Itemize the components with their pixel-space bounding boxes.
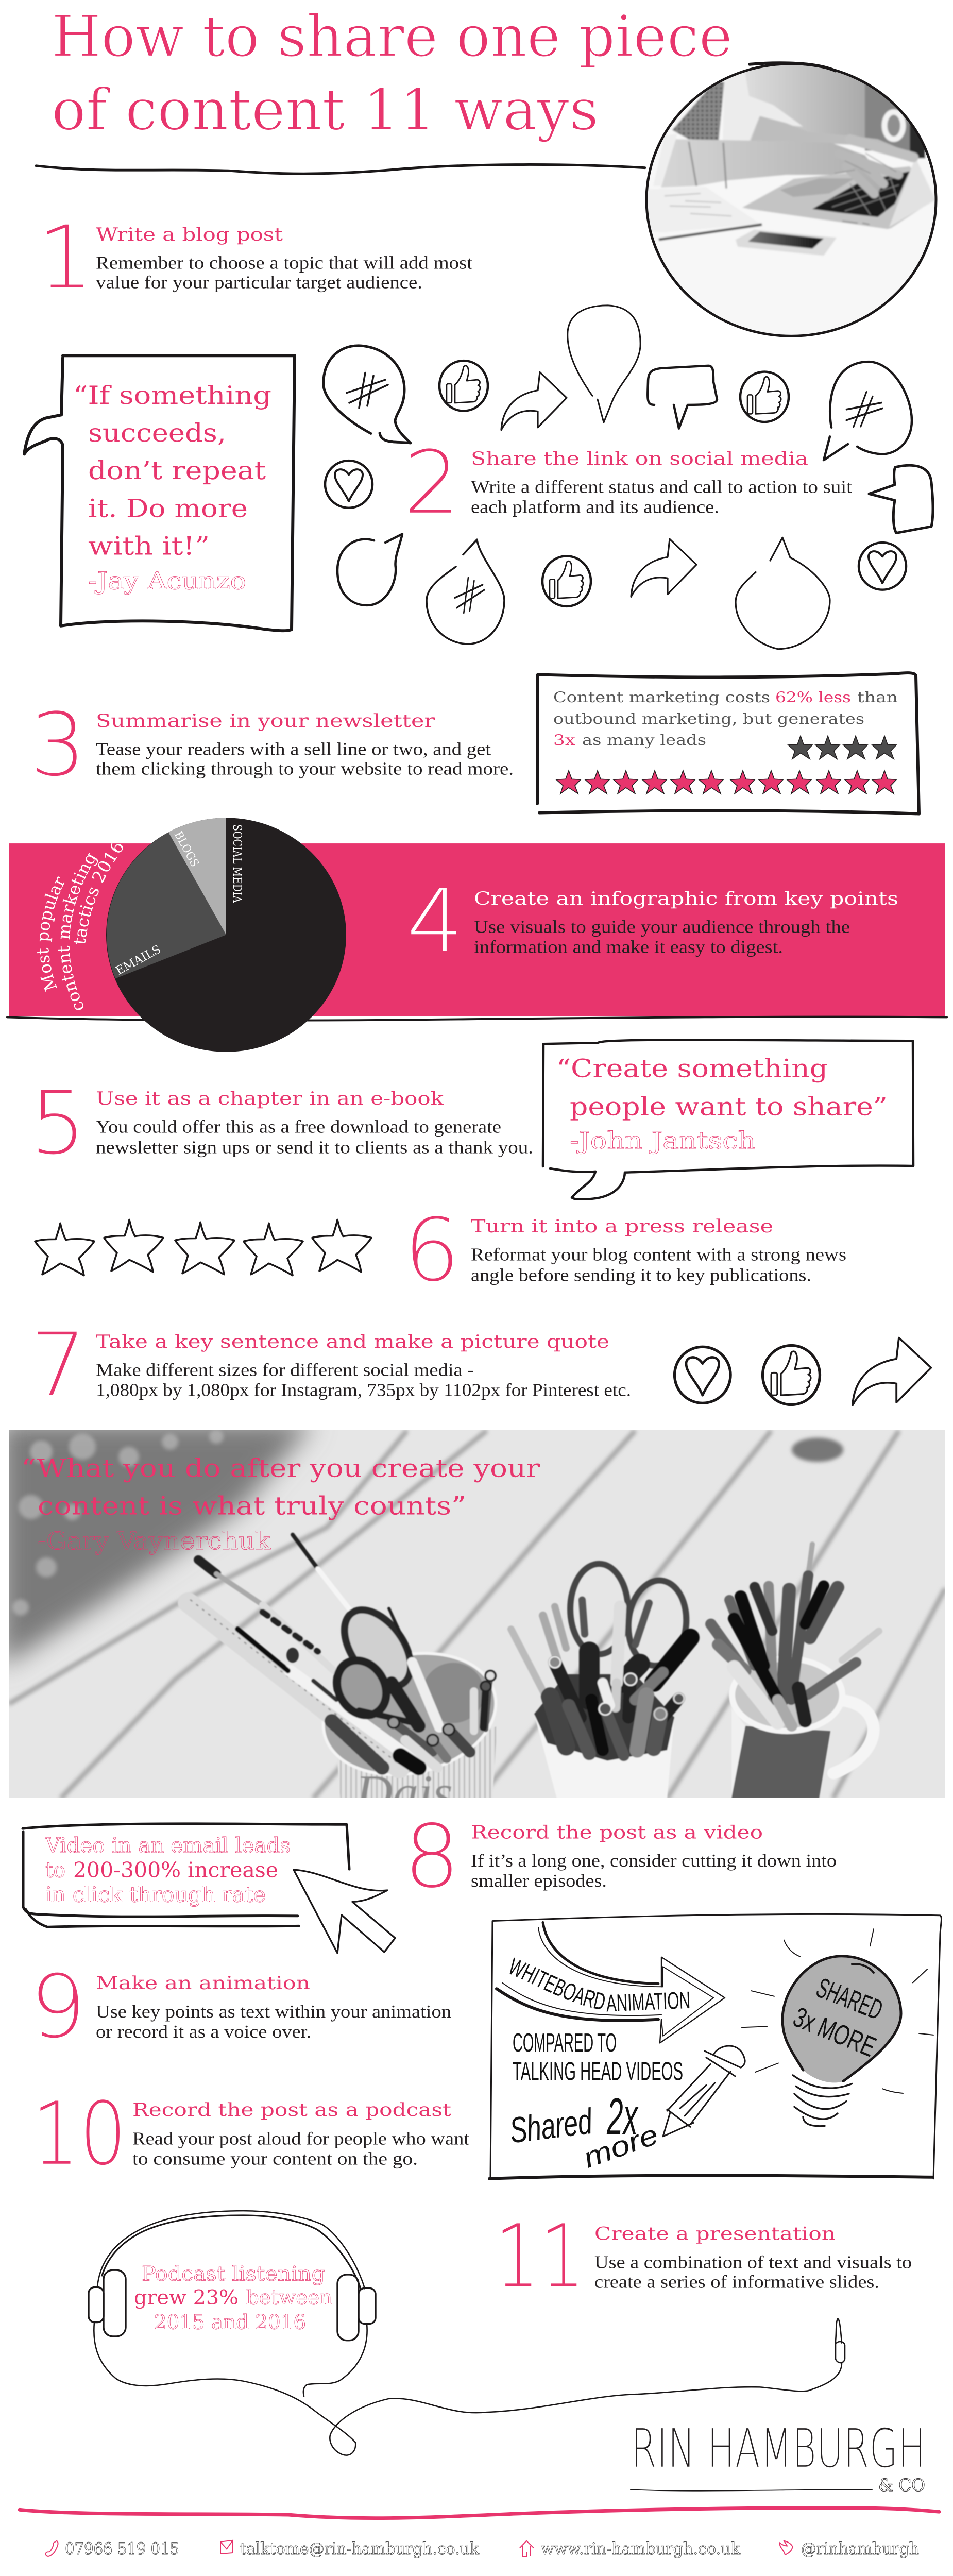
- step 2: each platform and its audience.: [471, 497, 719, 517]
- pot B: [534, 1714, 674, 1799]
- step 6: [403, 1199, 846, 1301]
- panel: video statistic: 200-300% increase: [73, 1858, 278, 1882]
- panel: whiteboard animation sketch: [488, 1913, 942, 2180]
- step 4: Use visuals to guide your audience through the: [474, 917, 850, 937]
- icon: large share arrow: [853, 1338, 931, 1405]
- step 2: Share the link on social media: [471, 449, 808, 469]
- logo: Rin Hamburgh & Co: & CO: [878, 2476, 925, 2496]
- panel: cost statistic: 3x: [553, 732, 575, 749]
- step 11: create a series of informative slides.: [594, 2272, 879, 2292]
- step 8: If it’s a long one, consider cutting it down into: [471, 1851, 837, 1871]
- step 10: 10: [32, 2083, 127, 2185]
- step 1: Write a blog post: [96, 225, 283, 245]
- step 2: Write a different status and call to action to suit: [471, 477, 852, 497]
- callout: podcast statistic: grew 23%: [134, 2286, 239, 2309]
- step 11: 11: [495, 2206, 585, 2308]
- panel: Jay Acunzo quote: -Jay Acunzo: [88, 567, 246, 595]
- step 8: 8: [403, 1806, 461, 1908]
- photo: pens and scissors in pots: Dais: [354, 1765, 453, 1821]
- step 1: [37, 207, 472, 309]
- icon: large heart: [675, 1347, 730, 1403]
- panel: video statistic: in click through rate: [45, 1882, 266, 1907]
- step 5: [29, 1073, 533, 1175]
- callout: podcast statistic: between: [246, 2286, 332, 2309]
- pot A: [336, 1726, 497, 1799]
- step 11: [495, 2206, 912, 2308]
- icon: bubble bottom left: [337, 534, 402, 605]
- whiteboard arrow: [497, 1922, 725, 2043]
- icon: share arrow 1: [501, 372, 567, 430]
- footer: email: talktome@rin-hamburgh.co.uk: [240, 2539, 480, 2558]
- pie chart: content marketing tactics: BLOGS: [172, 829, 201, 869]
- icon: thumbs up 2: [740, 372, 789, 422]
- panel: cost statistic: as many leads: [582, 732, 706, 749]
- step 1: Remember to choose a topic that will add most: [96, 252, 472, 273]
- step 8: Record the post as a video: [471, 1822, 763, 1843]
- icon: four grey stars: [788, 736, 896, 759]
- icon: hashtag bubble right: [824, 362, 912, 460]
- icon: pencil microphone: [663, 2046, 745, 2137]
- icon: heart 1: [325, 461, 372, 508]
- panel: John Jantsch quote: “Create something: [556, 1054, 828, 1083]
- step 5: You could offer this as a free download to generate: [96, 1117, 501, 1137]
- step 11: Create a presentation: [594, 2224, 836, 2244]
- arrow label: WHITEBOARD ANIMATION: [510, 1957, 689, 2011]
- footer: twitter: @rinhamburgh: [801, 2539, 919, 2558]
- photo: hands typing on laptop: [644, 60, 938, 342]
- callout: podcast statistic: 2015 and 2016: [154, 2311, 306, 2334]
- icon: light bulb: [742, 1929, 933, 2126]
- chart title: most popular content marketing tactics 2016: Most popular: [37, 876, 65, 992]
- panel: Jay Acunzo quote: it. Do more: [88, 494, 248, 523]
- step 7: 1,080px by 1,080px for Instagram, 735px by 1102px for Pinterest etc.: [96, 1380, 631, 1400]
- step 4: Create an infographic from key points: [474, 889, 898, 909]
- title underline squiggle: [36, 165, 645, 174]
- footer divider: [20, 2508, 939, 2518]
- handwritten note: shared 2x more: 2x: [606, 2088, 639, 2146]
- pot C: [833, 1700, 874, 1773]
- panel: Jay Acunzo quote: succeeds,: [88, 418, 226, 448]
- step 3: [29, 694, 514, 796]
- panel: cost statistic: Content marketing costs: [553, 689, 770, 706]
- step 5: 5: [29, 1073, 87, 1175]
- panel: video statistic: [23, 1824, 349, 1927]
- step 7: [30, 1314, 631, 1416]
- panel: Jay Acunzo quote: “If something: [73, 381, 271, 410]
- step 7: Take a key sentence and make a picture quote: [96, 1332, 609, 1352]
- step 5: newsletter sign ups or send it to clients as a thank you.: [96, 1137, 533, 1157]
- step 6: angle before sending it to key publications.: [471, 1265, 811, 1285]
- chart title: most popular content marketing tactics 2016: [37, 843, 123, 1010]
- step 11: Use a combination of text and visuals to: [594, 2252, 912, 2272]
- panel: Jay Acunzo quote: [24, 355, 295, 631]
- panel: video statistic: to: [45, 1858, 65, 1882]
- panel: cost statistic: than: [857, 689, 898, 706]
- panel: Jay Acunzo quote: with it!”: [88, 532, 210, 561]
- step 10: Record the post as a podcast: [132, 2100, 452, 2121]
- comparison label: COMPARED TO: [513, 2028, 617, 2058]
- step 10: [32, 2083, 469, 2185]
- handwritten note: shared 2x more: [507, 2088, 662, 2174]
- step 4: [406, 871, 898, 973]
- step 8: smaller episodes.: [471, 1871, 607, 1891]
- step 2: [403, 432, 852, 534]
- step 6: 6: [403, 1199, 461, 1301]
- panel: video statistic: Video in an email leads: [45, 1833, 291, 1858]
- step 10: to consume your content on the go.: [132, 2148, 418, 2168]
- step 3: Tease your readers with a sell line or two, and get: [96, 739, 491, 759]
- footer: website: www.rin-hamburgh.co.uk: [541, 2539, 741, 2558]
- panel: John Jantsch quote: [543, 1040, 913, 1199]
- step 3: Summarise in your newsletter: [96, 711, 435, 732]
- picture quote: Gary Vaynerchuk: “What you do after you create your: [21, 1454, 540, 1483]
- step 9: Use key points as text within your animation: [96, 2002, 451, 2022]
- chart title: most popular content marketing tactics 2016: tactics 2016: [74, 843, 123, 944]
- icon: share arrow 2: [631, 539, 696, 597]
- panel: cost statistic: 62% less: [775, 689, 851, 706]
- panel: John Jantsch quote: people want to share”: [570, 1092, 888, 1121]
- icon: mouse cursor: [294, 1870, 395, 1953]
- pie chart: content marketing tactics: SOCIAL MEDIA: [230, 824, 244, 903]
- icon: right speech bubble: [869, 465, 933, 533]
- pie chart: content marketing tactics: EMAILS: [113, 943, 163, 978]
- step 5: Use it as a chapter in an e-book: [96, 1089, 444, 1109]
- picture quote: Gary Vaynerchuk: [21, 1454, 540, 1555]
- picture quote: Gary Vaynerchuk: -Gary Vaynerchuk: [38, 1527, 271, 1555]
- footer: phone: 07966 519 015: [65, 2539, 179, 2558]
- step 3: 3: [29, 694, 87, 796]
- icon: heart 2: [859, 543, 906, 590]
- band underline: [7, 1017, 947, 1021]
- pie chart: content marketing tactics: [106, 818, 346, 1052]
- callout: podcast statistic: [134, 2263, 332, 2334]
- step 9: [29, 1956, 451, 2058]
- icon: hashtag bubble bottom: [427, 539, 504, 644]
- icon: empty speech bubble top: [568, 306, 640, 422]
- step 6: Turn it into a press release: [471, 1216, 773, 1237]
- icon: light bulb: 3x MORE: [789, 2001, 881, 2063]
- step 4: 4: [406, 871, 464, 973]
- step 7: 7: [30, 1314, 87, 1416]
- step 1: value for your particular target audience.: [96, 272, 422, 292]
- icon: thumbs up 1: [439, 361, 488, 411]
- panel: cost statistic: [537, 673, 919, 814]
- icon: hashtag bubble top left: [324, 346, 411, 443]
- callout: podcast statistic: Podcast listening: [142, 2263, 325, 2285]
- handwritten note: shared 2x more: more: [579, 2119, 662, 2174]
- step 7: Make different sizes for different social media -: [96, 1360, 474, 1380]
- picture quote: Gary Vaynerchuk: content is what truly counts”: [38, 1492, 466, 1520]
- icon: five outline stars: [35, 1219, 371, 1276]
- icon: twelve pink stars: [556, 771, 896, 794]
- icon: empty bubble bottom: [736, 537, 830, 649]
- panel: pink band: [9, 843, 945, 1016]
- title: [52, 3, 733, 143]
- step 2: 2: [403, 432, 461, 534]
- icon: thumbs up 3: [542, 556, 591, 606]
- icon: square speech bubble: [648, 366, 717, 429]
- step 8: [403, 1806, 837, 1908]
- icon: large thumbs up: [763, 1346, 820, 1405]
- title: How to share one piece: [52, 3, 733, 70]
- step 4: information and make it easy to digest.: [474, 937, 783, 957]
- comparison label: TALKING HEAD VIDEOS: [513, 2057, 683, 2086]
- comparison label: [513, 2028, 683, 2086]
- panel: John Jantsch quote: -John Jantsch: [570, 1127, 756, 1155]
- title: of content 11 ways: [52, 76, 599, 143]
- panel: Jay Acunzo quote: don’t repeat: [88, 456, 266, 485]
- icon: light bulb: SHARED: [812, 1972, 887, 2026]
- photo: pens and scissors in pots: [0, 1421, 945, 1821]
- step 3: them clicking through to your website to read more.: [96, 758, 514, 778]
- step 10: Read your post aloud for people who want: [132, 2128, 469, 2148]
- chart title: most popular content marketing tactics 2016: content marketing: [58, 853, 98, 1010]
- step 9: Make an animation: [96, 1973, 310, 1994]
- step 9: 9: [29, 1956, 87, 2058]
- icon: headphones with cable: [89, 2211, 845, 2455]
- step 9: or record it as a voice over.: [96, 2022, 311, 2042]
- step 1: 1: [37, 207, 94, 309]
- handwritten note: shared 2x more: Shared: [507, 2101, 595, 2151]
- panel: cost statistic: outbound marketing, but generates: [553, 710, 864, 727]
- step 6: Reformat your blog content with a strong news: [471, 1244, 846, 1264]
